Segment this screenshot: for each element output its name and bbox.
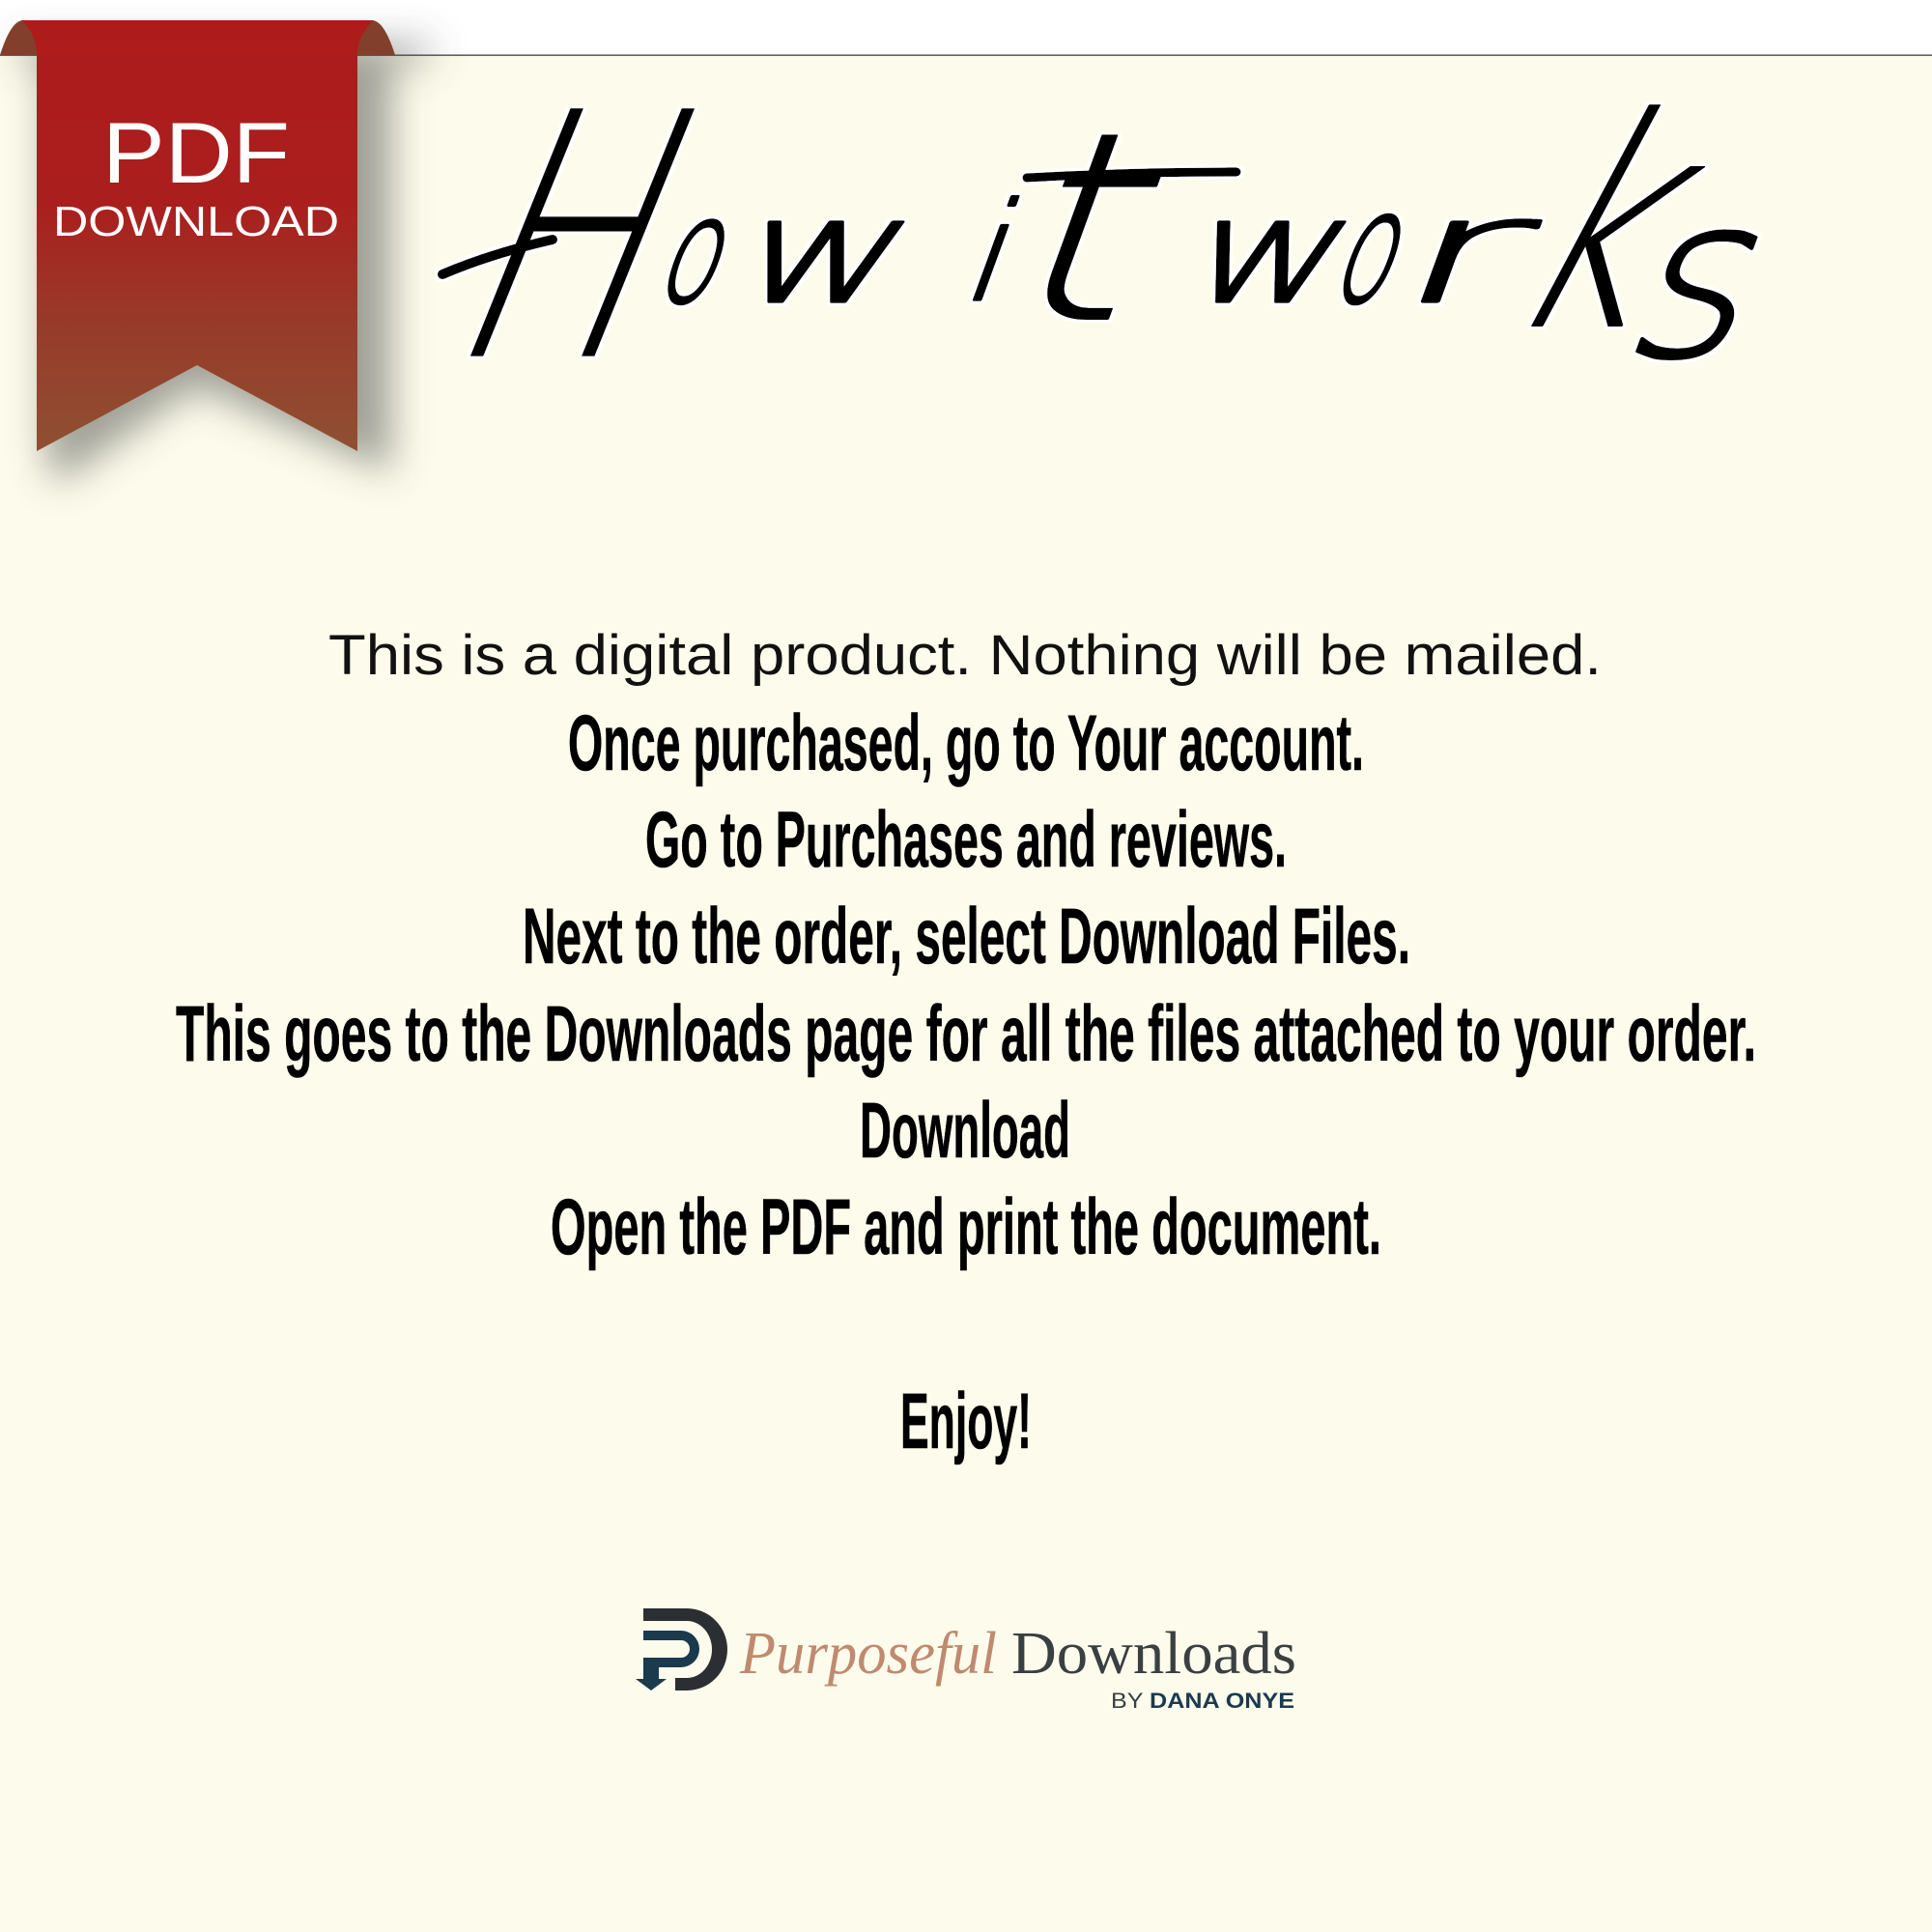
ribbon body — [21, 20, 374, 451]
ribbon right fold — [328, 20, 395, 55]
instruction steps — [176, 699, 1756, 1465]
title: How it works: i — [948, 175, 1042, 332]
title: How it works: r — [1378, 167, 1559, 336]
ribbon shadow — [19, 43, 430, 483]
ribbon left fold — [0, 20, 58, 55]
logo: Purposeful Downloads — [636, 1608, 1296, 1713]
step 5: Download — [860, 1087, 1070, 1175]
title: How it works: o — [1315, 158, 1437, 338]
title: How it works: w — [1166, 168, 1381, 336]
logo byline: BY DANA ONYE — [1111, 1689, 1294, 1713]
title: How it works: t — [978, 77, 1210, 381]
title: How it works: o — [640, 168, 759, 336]
title: How it works: H — [410, 42, 752, 436]
title: How it works: w — [716, 166, 941, 336]
title: How it works: k — [1459, 58, 1772, 394]
closing: Enjoy!: Enjoy! — [900, 1378, 1032, 1465]
logo word Purposeful: Purposeful — [739, 1621, 997, 1687]
ribbon badge: PDF download — [0, 20, 430, 483]
intro sentence: This is a digital product. Nothing will be mailed. — [328, 624, 1602, 687]
logo icon: D outline — [643, 1608, 727, 1690]
step 1: Once purchased, go to Your account. — [568, 699, 1364, 787]
title: How it works — [410, 42, 1809, 436]
ribbon label DOWNLOAD: DOWNLOAD — [53, 198, 339, 245]
title: How it works: s — [1600, 151, 1809, 409]
logo word Downloads: Downloads — [1011, 1621, 1296, 1687]
logo icon: P with download arrow — [636, 1631, 699, 1690]
ribbon label PDF: PDF — [102, 104, 290, 201]
step 2: Go to Purchases and reviews. — [645, 796, 1287, 884]
